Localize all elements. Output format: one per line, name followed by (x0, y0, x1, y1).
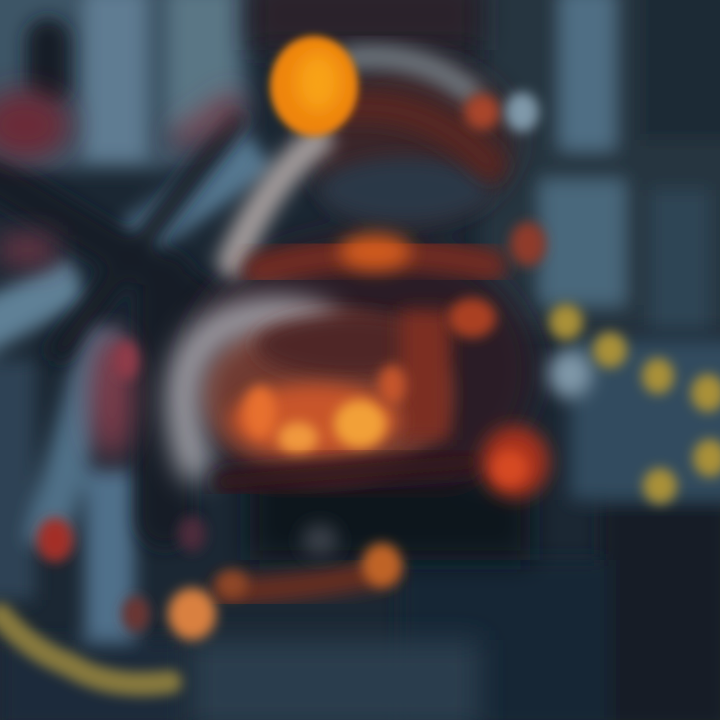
window: pale rim (183, 314, 320, 465)
panel: orange lights on dome (339, 92, 592, 498)
panel: yellow dotted lights right (549, 304, 720, 504)
window: dark upper interior (255, 313, 445, 377)
panel: central dome body (185, 57, 535, 560)
dome: pale left edge (232, 140, 318, 262)
window: base rim (225, 462, 470, 482)
icon: orange orb (270, 36, 358, 136)
panel: blue-grey left structure (0, 0, 275, 720)
dome: red band (260, 254, 490, 270)
window: right red column (400, 310, 450, 440)
panel: red accents upper left (0, 90, 245, 460)
panel: yellow dotted path lower left (0, 615, 170, 684)
icon: red light left (37, 340, 139, 562)
dome: dark band (320, 158, 490, 222)
dome: brown-red upper band (345, 107, 490, 165)
panel: dark diagonal beams (0, 40, 235, 520)
panel: lower bar with orange lights (122, 516, 402, 640)
window: glow (230, 384, 400, 456)
dome: grey arc at top (350, 57, 470, 92)
panel: glowing window (183, 310, 470, 482)
panel: blue-grey right structure (400, 0, 720, 720)
panel: top centre dark background (190, 0, 480, 720)
